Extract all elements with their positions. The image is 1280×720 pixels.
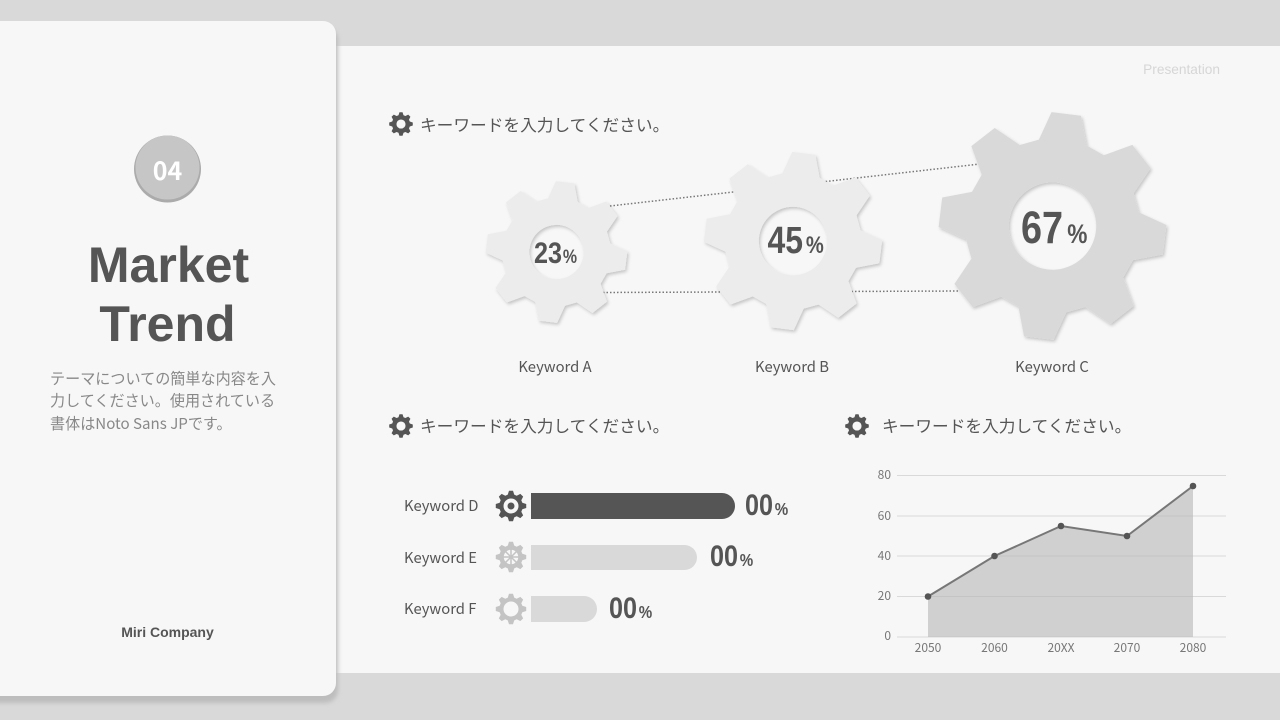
- bar row E: [404, 539, 753, 572]
- company name: Miri Company: [121, 624, 214, 640]
- keyword labels: Keyword C: [1015, 356, 1089, 377]
- keyword labels: [518, 356, 1089, 377]
- heading: gear comparison: キーワードを入力してください。: [420, 112, 669, 136]
- area chart: 20: [878, 587, 891, 604]
- area chart: 60: [878, 507, 891, 524]
- bar row F: [404, 591, 652, 624]
- description: テーマについての簡単な内容を入: [50, 367, 276, 389]
- gear B 45%: 45%: [768, 219, 824, 262]
- area chart: 2080: [1180, 639, 1207, 656]
- presentation label: Presentation: [1143, 62, 1220, 77]
- title: Market: [88, 237, 249, 293]
- area chart: 80: [878, 466, 891, 483]
- bar row E: Keyword E: [404, 547, 477, 568]
- area chart: 2070: [1114, 639, 1141, 656]
- heading: bar list: キーワードを入力してください。: [420, 413, 669, 437]
- keyword labels: Keyword A: [518, 356, 592, 377]
- main content panel: [330, 46, 1280, 673]
- heading: area chart: キーワードを入力してください。: [882, 413, 1131, 437]
- title: Trend: [99, 296, 236, 352]
- section number badge: [134, 136, 201, 202]
- gear C 67%: 67%: [1021, 202, 1087, 253]
- area chart: 2050: [915, 639, 942, 656]
- bar row D: 00%: [745, 488, 788, 521]
- description: 力してください。使用されている: [50, 389, 275, 411]
- area chart: [878, 466, 1226, 656]
- panel: left title card: [0, 21, 338, 703]
- bar row D: Keyword D: [404, 495, 478, 516]
- bar row E: 00%: [710, 539, 753, 572]
- area chart: 40: [878, 547, 891, 564]
- keyword labels: Keyword B: [755, 356, 829, 377]
- section number badge: 04: [153, 152, 182, 188]
- area chart: 2060: [981, 639, 1008, 656]
- area chart: 0: [884, 627, 891, 644]
- area chart: 20XX: [1047, 639, 1075, 656]
- gear A 23%: [478, 174, 635, 330]
- gear C 67%: [927, 100, 1178, 352]
- dotted connector lines: [603, 164, 980, 292]
- gear A 23%: 23%: [534, 236, 577, 269]
- gear B 45%: [695, 143, 891, 339]
- bar row F: 00%: [609, 591, 652, 624]
- description: 書体はNoto Sans JPです。: [50, 412, 232, 434]
- bar row D: [404, 488, 788, 521]
- bar row F: Keyword F: [404, 598, 476, 619]
